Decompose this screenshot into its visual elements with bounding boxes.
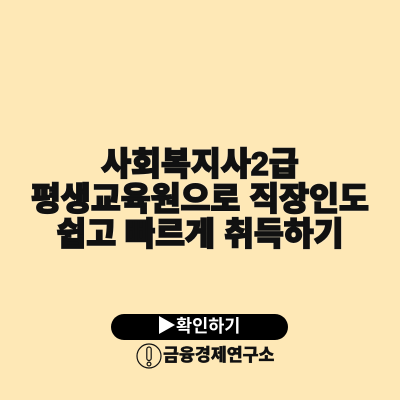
- icon: exclamation circle: [136, 343, 162, 369]
- brand name: 금융경제연구소: [163, 345, 274, 365]
- button: confirm: [111, 314, 288, 340]
- brand logo: [136, 343, 274, 369]
- title: 쉽고 빠르게 취득하기: [56, 216, 344, 252]
- title: [31, 146, 369, 252]
- button label: 확인하기: [176, 316, 240, 336]
- title: 사회복지사2급: [101, 146, 299, 182]
- icon: play triangle: [159, 316, 175, 334]
- title: 평생교육원으로 직장인도: [31, 181, 369, 217]
